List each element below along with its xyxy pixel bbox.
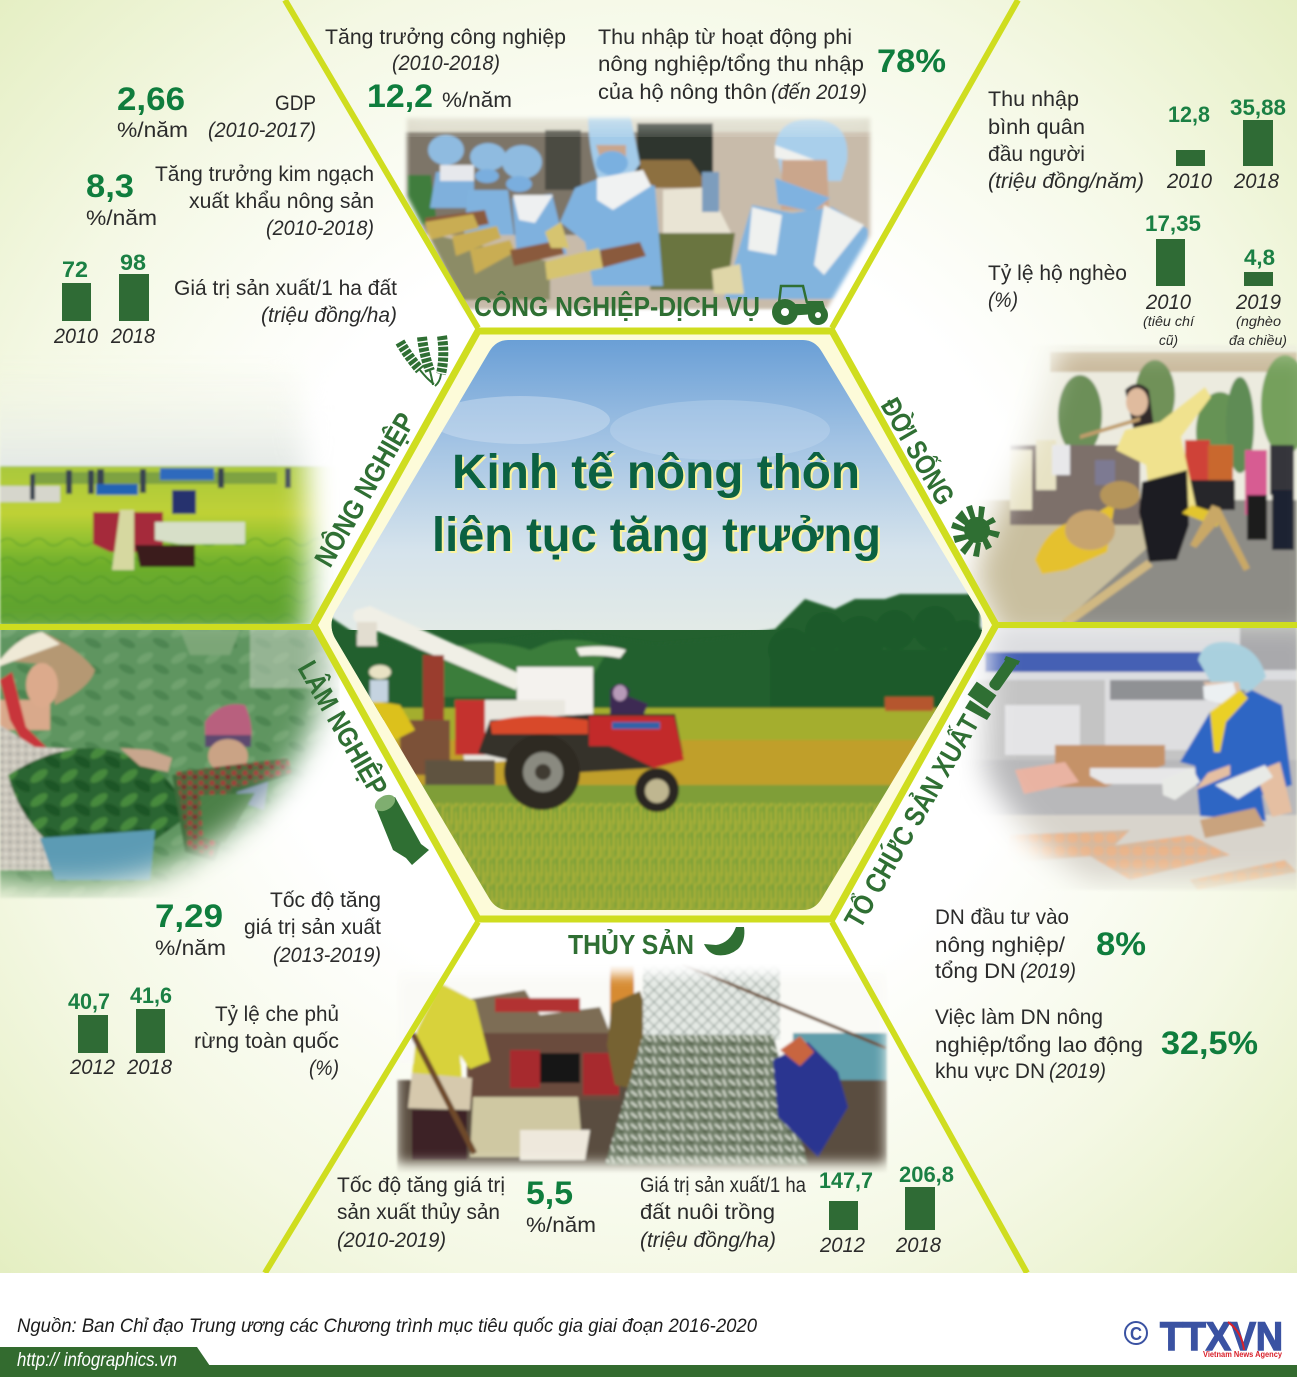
worker two bbox=[545, 107, 663, 286]
bar chart: income per capita: đầu người bbox=[988, 143, 1085, 166]
central hexagon bbox=[314, 331, 1000, 919]
stat: non-farm income share: (đến 2019) bbox=[771, 81, 867, 104]
icon: tractor bbox=[772, 286, 828, 325]
stat: non-farm income share: nông nghiệp/tổng thu nhập bbox=[598, 53, 864, 76]
section heading: Đời sống: ĐỜI SỐNG bbox=[875, 392, 962, 510]
leaves and basket bbox=[7, 746, 181, 840]
stat: industrial growth: (2010-2018) bbox=[392, 52, 500, 75]
stat: non-farm income share: của hộ nông thôn bbox=[598, 81, 767, 104]
stat: industrial growth: %/năm bbox=[442, 89, 512, 112]
stat: export growth: xuất khẩu nông sản bbox=[189, 190, 374, 213]
bar chart: poverty rate: cũ) bbox=[1159, 332, 1178, 348]
bar chart: production value per ha: Giá trị sản xuất/1 ha đất bbox=[174, 277, 397, 300]
bar chart: income per capita: 2018 bbox=[1233, 170, 1279, 193]
stat: GDP bbox=[117, 81, 316, 142]
section heading: Thủy sản: THỦY SẢN bbox=[568, 928, 694, 960]
stat: export growth: Tăng trưởng kim ngạch bbox=[155, 163, 374, 186]
harvester bbox=[353, 606, 684, 812]
stat: agricultural enterprises share: DN đầu tư vào bbox=[935, 906, 1069, 929]
stat: GDP: GDP bbox=[275, 92, 316, 115]
bar chart: production value per ha: 2018 bbox=[110, 325, 155, 348]
stat: fisheries growth: 5,5 bbox=[526, 1175, 573, 1211]
man in brown bbox=[606, 990, 645, 1088]
man in blue bbox=[773, 1042, 848, 1157]
stat: industrial growth bbox=[325, 26, 566, 114]
stat: agricultural enterprises share bbox=[935, 906, 1146, 983]
bar chart: income per capita: Thu nhập bbox=[988, 88, 1079, 111]
stat: agricultural enterprises share: 8% bbox=[1096, 926, 1146, 962]
stat: agricultural enterprises share: nông nghiệp/ bbox=[935, 934, 1065, 957]
panel: production organisation stats bbox=[935, 906, 1258, 1083]
stat: fisheries growth bbox=[337, 1174, 596, 1252]
bar chart: poverty rate: Tỷ lệ hộ nghèo bbox=[988, 262, 1127, 285]
photo: rice field harvester bbox=[0, 392, 330, 624]
bar chart: aquaculture value per ha: (triệu đồng/ha) bbox=[640, 1229, 776, 1252]
bar chart: poverty rate: 2019 bbox=[1235, 291, 1281, 314]
stat: non-farm income share: Thu nhập từ hoạt động phi bbox=[598, 26, 852, 49]
stat: GDP: 2,66 bbox=[117, 81, 185, 117]
stat: production growth: (2013-2019) bbox=[273, 944, 381, 967]
logo: TTXVN: C bbox=[1130, 1324, 1142, 1344]
stat: export growth: 8,3 bbox=[86, 168, 134, 204]
arms and gloves bbox=[424, 208, 490, 228]
bar chart: forest cover: Tỷ lệ che phủ bbox=[215, 1003, 339, 1026]
stat: export growth bbox=[86, 163, 374, 240]
bar chart: production value per ha: 72 bbox=[62, 257, 88, 282]
bar chart: aquaculture value per ha: 147,7 bbox=[819, 1168, 873, 1193]
icon: log bbox=[372, 791, 429, 865]
section heading: Lâm nghiệp: LÂM NGHIỆP bbox=[292, 656, 394, 801]
stat: non-farm income share bbox=[598, 26, 946, 104]
woman with hat bbox=[0, 630, 96, 872]
stat: export growth: %/năm bbox=[86, 207, 157, 230]
stat: production growth: %/năm bbox=[155, 937, 226, 960]
bar chart: aquaculture value per ha bbox=[640, 1162, 954, 1257]
source note: Nguồn: Ban Chỉ đạo Trung ương các Chương trình mục tiêu quốc gia giai đoạn 2016-2020 bbox=[17, 1316, 757, 1337]
icon: hands in circle bbox=[951, 505, 1000, 557]
stat: production growth bbox=[155, 889, 381, 967]
bar chart: aquaculture value per ha: 2012 bbox=[819, 1234, 865, 1257]
stat: agricultural enterprise jobs: (2019) bbox=[1049, 1060, 1106, 1083]
photo: egg processing factory bbox=[960, 625, 1297, 890]
panel: living standards stats bbox=[988, 88, 1287, 348]
stat: agricultural enterprise jobs bbox=[935, 1006, 1258, 1083]
section heading: Nông nghiệp: NÔNG NGHIỆP bbox=[307, 407, 421, 572]
title: Kinh tế nông thôn bbox=[452, 446, 860, 499]
bar chart: aquaculture value per ha: đất nuôi trồng bbox=[640, 1201, 775, 1224]
bar chart: aquaculture value per ha: 206,8 bbox=[899, 1162, 954, 1187]
website: http:// infographics.vn bbox=[17, 1350, 177, 1371]
photo: tractor in rice field bbox=[320, 340, 1000, 913]
bar chart: income per capita: bình quân bbox=[988, 116, 1085, 139]
bar chart: forest cover: 2018 bbox=[126, 1056, 172, 1079]
title: liên tục tăng trưởng bbox=[432, 509, 881, 562]
stat: industrial growth: 12,2 bbox=[367, 78, 433, 114]
panel: fisheries stats bbox=[337, 1162, 954, 1257]
bar chart: forest cover: rừng toàn quốc bbox=[194, 1030, 339, 1053]
egg tray bbox=[1055, 745, 1165, 787]
bar chart: income per capita: 35,88 bbox=[1230, 95, 1286, 120]
bar chart: poverty rate: 2010 bbox=[1145, 291, 1191, 314]
net bbox=[643, 965, 780, 1040]
panel: industry and services stats bbox=[325, 26, 946, 114]
panel: forestry stats bbox=[68, 889, 381, 1080]
stat: agricultural enterprise jobs: Việc làm DN nông bbox=[935, 1006, 1103, 1029]
bar chart: production value per ha: (triệu đồng/ha) bbox=[261, 304, 397, 327]
bar chart: forest cover: 40,7 bbox=[68, 989, 110, 1014]
bar chart: poverty rate bbox=[988, 211, 1287, 348]
bar chart: income per capita: 2010 bbox=[1166, 170, 1212, 193]
bar chart: poverty rate: (tiêu chí bbox=[1143, 313, 1196, 329]
bar chart: poverty rate: 17,35 bbox=[1145, 211, 1201, 236]
yellow-shirted fisherman bbox=[408, 983, 490, 1160]
icon: fish bbox=[704, 927, 744, 955]
logo: TTXVN: Vietnam News Agency bbox=[1203, 1350, 1283, 1359]
bar chart: aquaculture value per ha: 2018 bbox=[895, 1234, 941, 1257]
bar chart: poverty rate: 4,8 bbox=[1244, 245, 1275, 270]
bar chart: poverty rate: (nghèo bbox=[1236, 313, 1281, 329]
fish catch bbox=[605, 1035, 808, 1165]
stat: production growth: giá trị sản xuất bbox=[244, 916, 381, 939]
worker three bbox=[502, 145, 567, 259]
stat: industrial growth: Tăng trưởng công nghiệp bbox=[325, 26, 566, 49]
worker four bbox=[464, 143, 514, 235]
stat: agricultural enterprise jobs: khu vực DN bbox=[935, 1060, 1045, 1083]
stat: GDP: %/năm bbox=[117, 119, 188, 142]
stat: agricultural enterprise jobs: 32,5% bbox=[1161, 1025, 1258, 1061]
bar chart: production value per ha bbox=[53, 250, 397, 348]
logo: TTXVN: TTXVN bbox=[1160, 1315, 1283, 1359]
stat: export growth: (2010-2018) bbox=[266, 217, 374, 240]
stat: non-farm income share: 78% bbox=[877, 43, 946, 79]
woman with headscarf bbox=[205, 704, 270, 810]
trays bbox=[470, 1097, 583, 1157]
baskets bbox=[1035, 502, 1115, 574]
bar chart: forest cover: 2012 bbox=[69, 1056, 115, 1079]
title: Kinh tế nông thôn bbox=[454, 448, 862, 501]
hills and trees bbox=[320, 594, 980, 714]
footer tab bbox=[0, 1347, 210, 1366]
bar chart: forest cover: 41,6 bbox=[130, 983, 172, 1008]
bar chart: production value per ha: 2010 bbox=[53, 325, 98, 348]
section heading: Tổ chức sản xuất: TỔ CHỨC SẢN XUẤT bbox=[837, 709, 985, 933]
worker one bbox=[712, 119, 871, 299]
dancer bbox=[1080, 384, 1211, 562]
icon: wheat bbox=[400, 336, 443, 386]
stat: agricultural enterprise jobs: nghiệp/tổng lao động bbox=[935, 1034, 1143, 1057]
bar chart: income per capita bbox=[988, 88, 1286, 193]
stat: GDP: (2010-2017) bbox=[208, 119, 316, 142]
stat: production growth: 7,29 bbox=[155, 898, 223, 934]
egg rows bbox=[1080, 835, 1230, 880]
worker five bbox=[428, 135, 474, 208]
bar chart: poverty rate: đa chiều) bbox=[1229, 332, 1287, 348]
stat: fisheries growth: Tốc độ tăng giá trị bbox=[337, 1174, 505, 1197]
icon: tool wrench bbox=[965, 656, 1020, 720]
stat: fisheries growth: %/năm bbox=[526, 1214, 596, 1237]
photo: food processing workers bbox=[400, 100, 880, 310]
harvester bbox=[93, 468, 245, 570]
bar chart: income per capita: (triệu đồng/năm) bbox=[988, 170, 1144, 193]
far field bbox=[394, 706, 938, 742]
stat: agricultural enterprises share: tổng DN bbox=[935, 960, 1016, 983]
rope bbox=[682, 964, 886, 1048]
footer bbox=[0, 1273, 1297, 1377]
worker in blue bbox=[1162, 642, 1292, 821]
tree line bbox=[978, 626, 982, 638]
bar chart: income per capita: 12,8 bbox=[1168, 102, 1210, 127]
crowd bbox=[1010, 445, 1140, 525]
photo: coffee harvest bbox=[0, 628, 340, 898]
title bbox=[432, 446, 883, 564]
bar chart: production value per ha: 98 bbox=[120, 250, 146, 275]
photo: fishing boat bbox=[397, 963, 887, 1173]
stat: agricultural enterprises share: (2019) bbox=[1020, 960, 1076, 983]
title: liên tục tăng trưởng bbox=[434, 511, 883, 564]
bar chart: aquaculture value per ha: Giá trị sản xuất/1 ha bbox=[640, 1174, 806, 1197]
bar chart: forest cover: (%) bbox=[309, 1057, 339, 1080]
bar chart: forest cover bbox=[68, 983, 339, 1080]
stat: production growth: Tốc độ tăng bbox=[270, 889, 381, 912]
stat: fisheries growth: sản xuất thủy sản bbox=[337, 1201, 500, 1224]
stat: fisheries growth: (2010-2019) bbox=[337, 1229, 446, 1252]
panel: agriculture stats bbox=[53, 81, 397, 348]
photo: cultural performance bbox=[960, 345, 1297, 626]
hexagon frame bbox=[314, 331, 996, 919]
bar chart: poverty rate: (%) bbox=[988, 289, 1018, 312]
section heading: Công nghiệp-Dịch vụ: CÔNG NGHIỆP-DỊCH VỤ bbox=[474, 290, 760, 322]
